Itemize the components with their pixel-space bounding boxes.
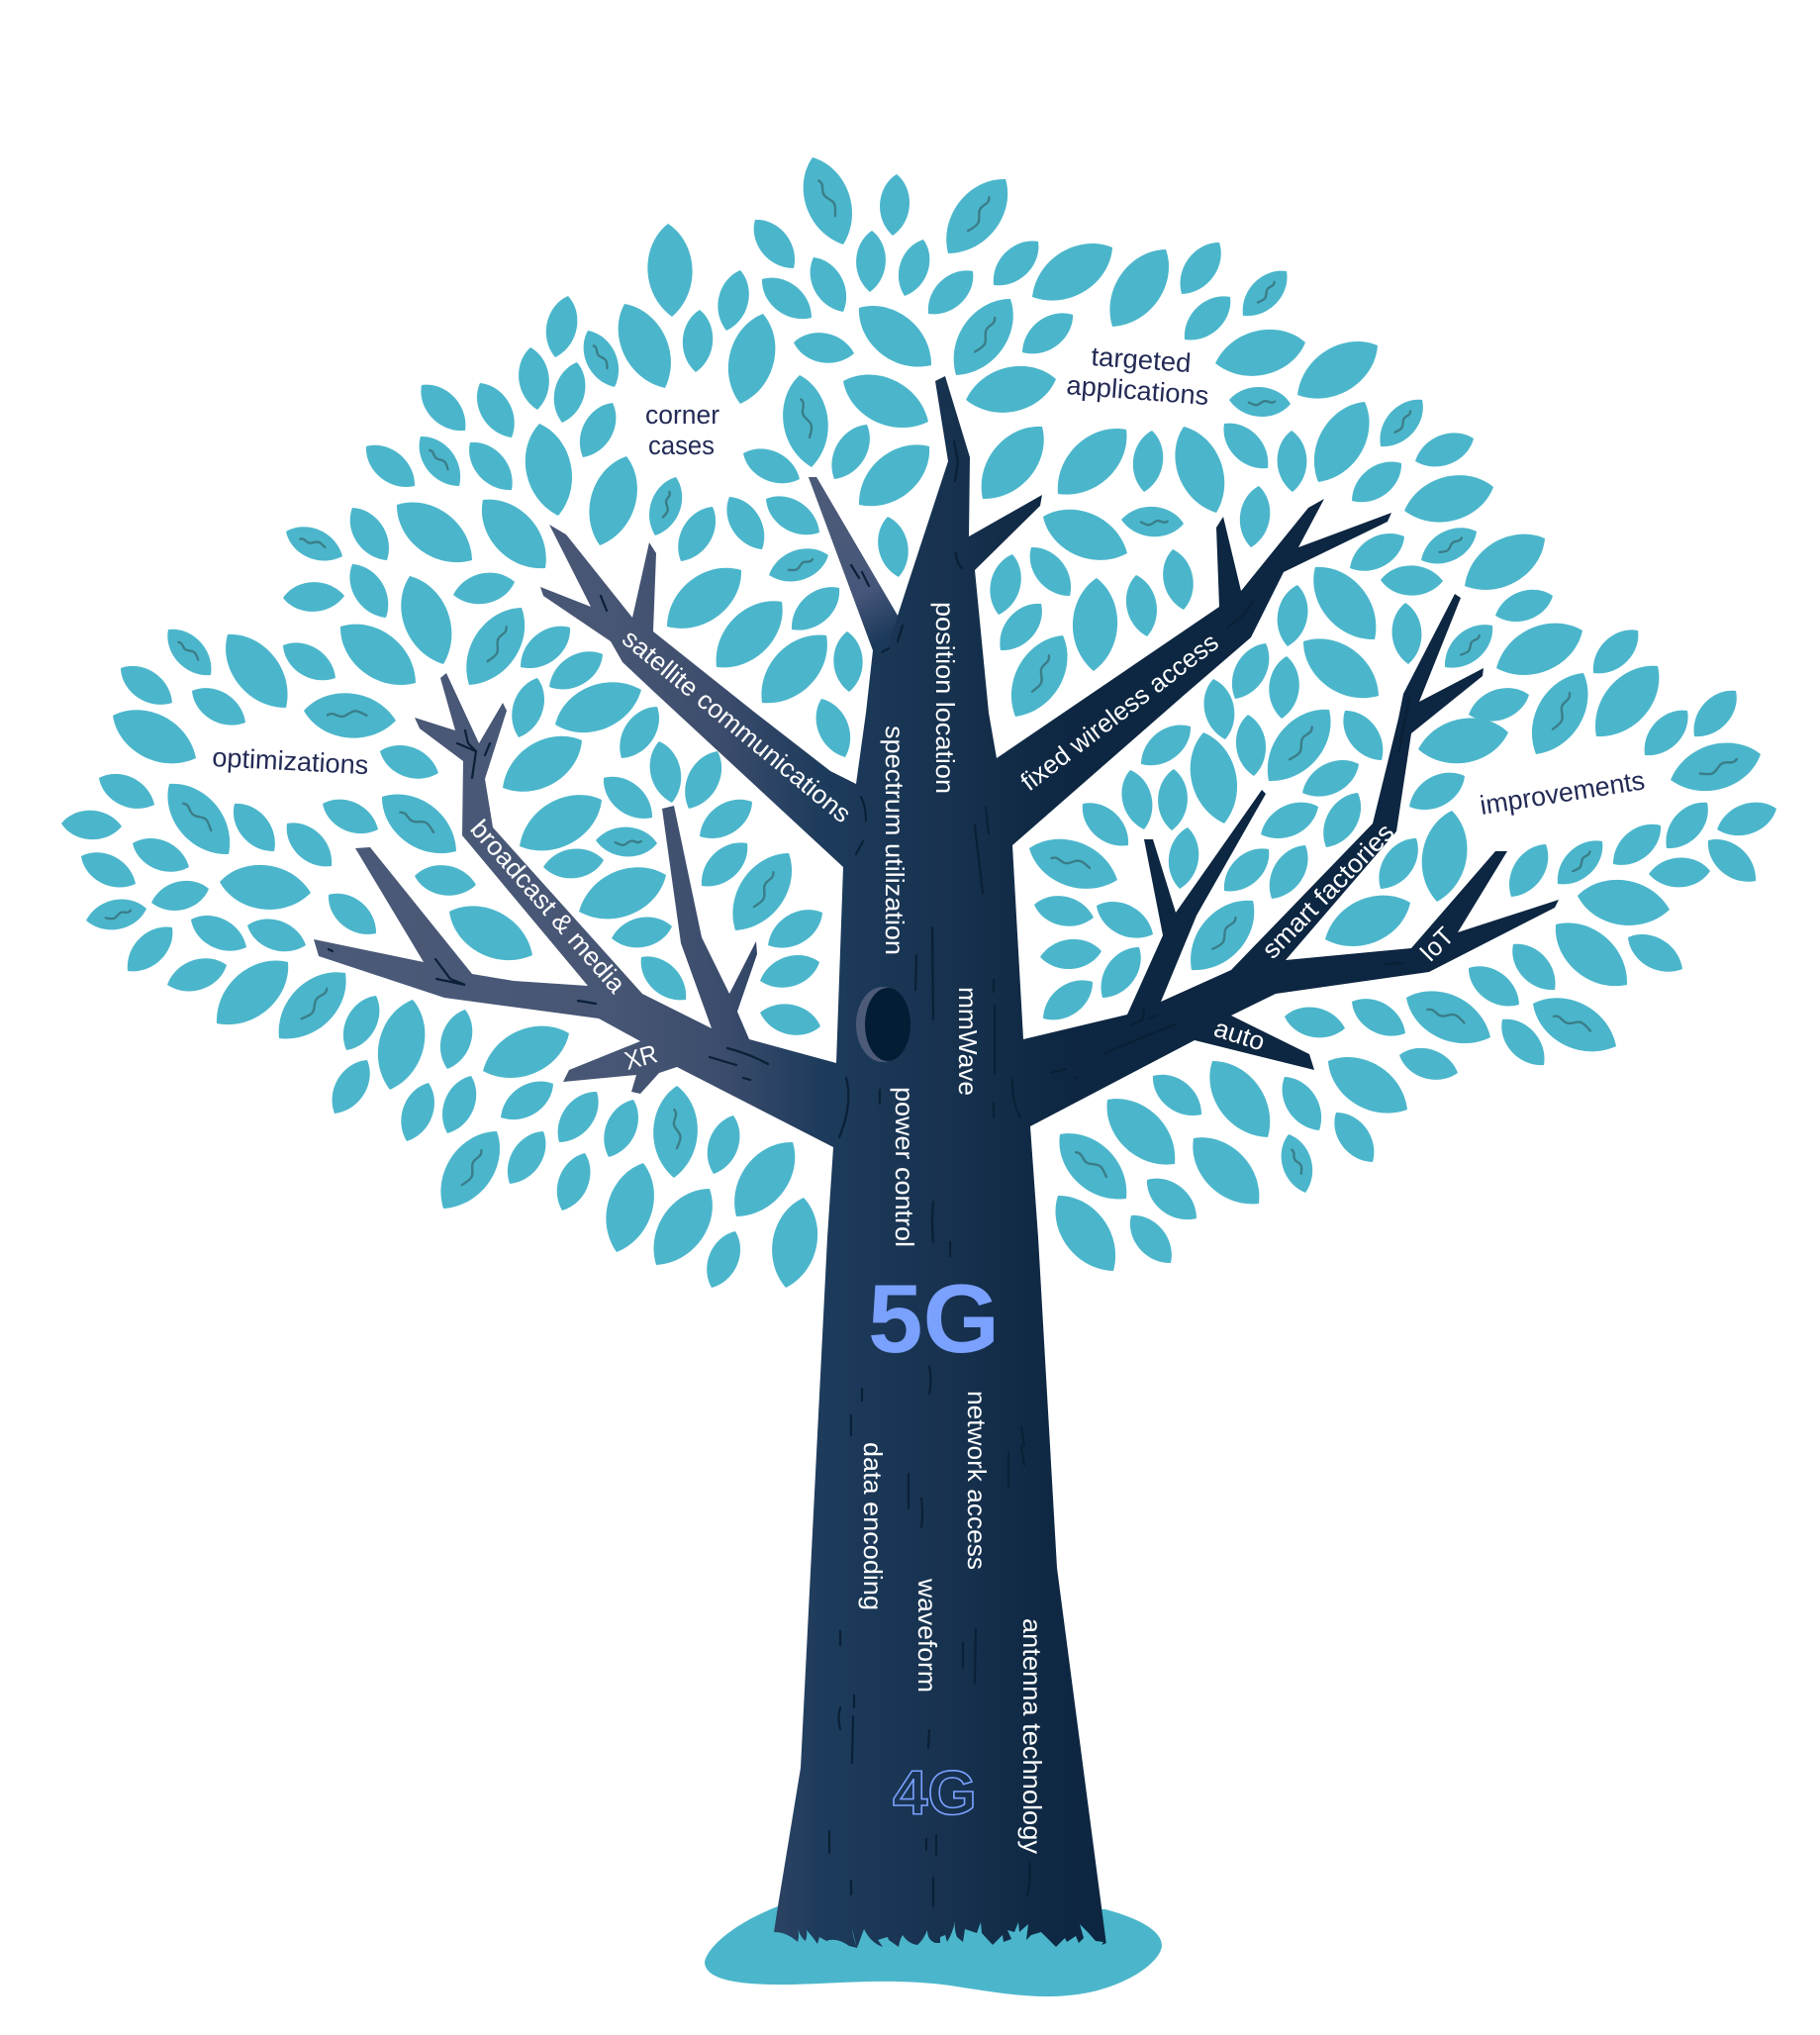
tree trunk and branches: [314, 376, 1559, 1955]
label: auto: auto: [1210, 1013, 1269, 1057]
label: position location: position location: [930, 602, 960, 794]
label: broadcast and media: broadcast & media: [464, 814, 632, 999]
bark marks: [329, 441, 1409, 1906]
ground mound: [705, 1906, 1162, 1996]
label: network access: network access: [962, 1391, 992, 1570]
label: XR: XR: [622, 1038, 660, 1076]
label: mmWave: mmWave: [953, 987, 983, 1096]
label: smart factories: smart factories: [1256, 818, 1399, 964]
label: IoT: IoT: [1413, 921, 1460, 967]
heading: 5G: 5G: [868, 1264, 1000, 1373]
label: antenna technology: antenna technology: [1017, 1618, 1047, 1854]
leaf canopy: [60, 150, 1781, 1294]
spectrum branch highlight: [809, 477, 898, 653]
label: corner: corner: [645, 400, 719, 430]
grass: [774, 1921, 1106, 1955]
label: optimizations: optimizations: [212, 742, 369, 780]
trunk labels: [858, 602, 1047, 1854]
label: power control: power control: [890, 1087, 919, 1247]
label: fixed wireless access: fixed wireless access: [1014, 627, 1224, 797]
label: improvements: improvements: [1478, 765, 1647, 821]
label: applications: applications: [1066, 370, 1209, 411]
label: data encoding: data encoding: [858, 1442, 888, 1610]
label: spectrum utilization: spectrum utilization: [880, 726, 910, 955]
label: waveform: waveform: [912, 1578, 942, 1693]
branch labels: [464, 623, 1460, 1076]
heading: 4G outline: 4G: [893, 1759, 977, 1828]
label: satellite communications: satellite communications: [617, 623, 857, 828]
canopy labels: [212, 341, 1647, 821]
label: targeted: targeted: [1091, 341, 1192, 378]
tree hollow: [856, 987, 910, 1062]
label: cases: cases: [648, 431, 715, 460]
